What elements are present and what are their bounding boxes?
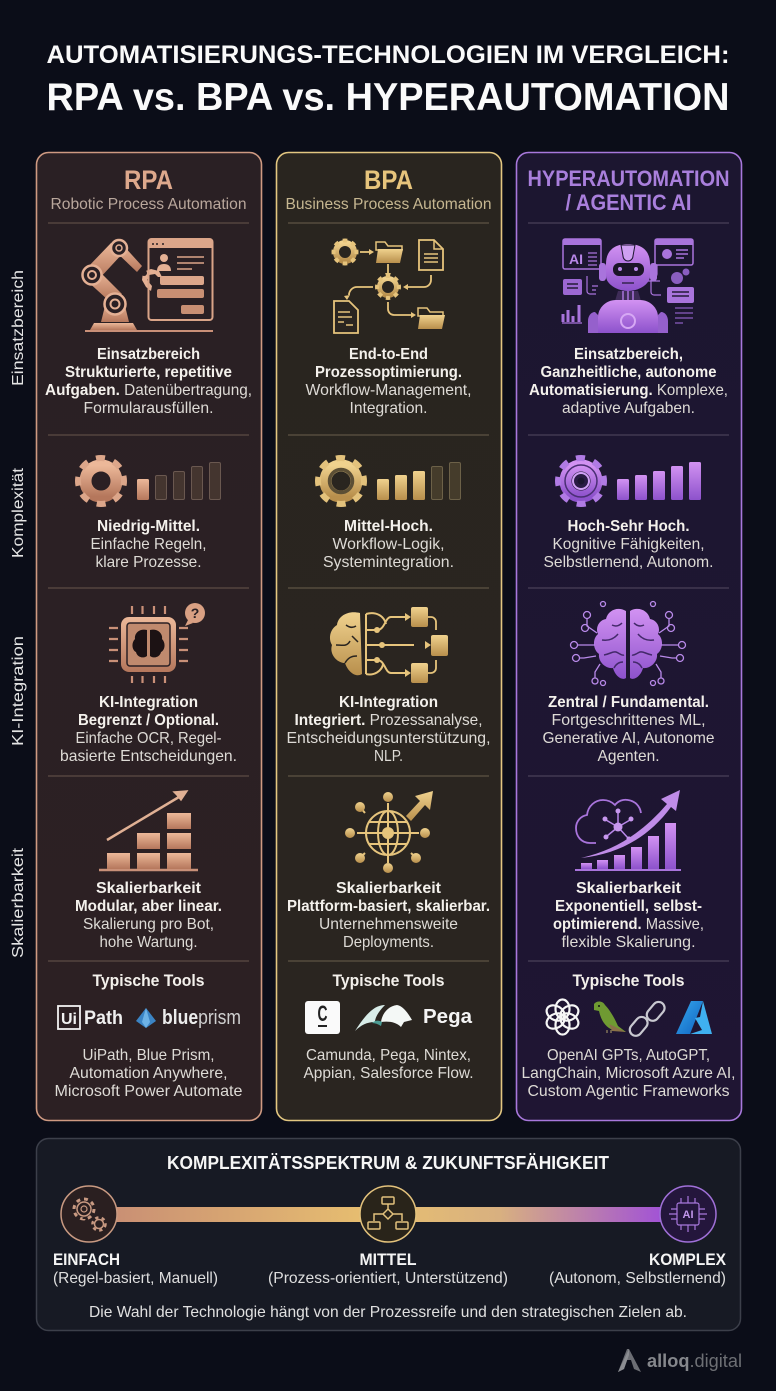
text: Einsatzbereich BPA: Prozessoptimierung. [315,364,462,381]
panel: complexity spectrum [36,1138,740,1330]
text: Komplexität BPA: Systemintegration. [323,554,454,571]
text: tools RPA: UiPath, Blue Prism, [82,1047,214,1064]
conclusion text: Die Wahl der Technologie hängt von der Prozessreife und den strategischen Zielen ab. [89,1304,687,1321]
text: Komplexität RPA: Einfache Regeln, [90,536,206,553]
text: Einsatzbereich BPA: Workflow-Management, [306,382,472,399]
row labels: Skalierbarkeit [10,847,27,958]
text: Skalierbarkeit BPA: Plattform-basiert, skalierbar. [287,898,490,915]
title: RPA vs. BPA vs. HYPERAUTOMATION [46,76,730,119]
text: tools BPA [304,1047,474,1082]
icon: robot arm and form [82,239,213,331]
text: Komplexität Hyperautomation: Selbstlernend, Autonom. [544,554,714,571]
label: Mittel: MITTEL [360,1250,416,1269]
text: Einsatzbereich Hyperautomation: adaptive Aufgaben. [562,400,695,417]
icon: brain to workflow [330,607,448,683]
text: tools Hyperautomation: LangChain, Microsoft Azure AI, [522,1065,736,1082]
text: Einsatzbereich RPA: Formularausfüllen. [84,400,214,417]
text: Einsatzbereich RPA: Aufgaben. Datenübertragung, [45,382,252,399]
icon: simple node with gears [61,1186,117,1242]
text: Komplexität RPA: klare Prozesse. [96,554,202,571]
icon: complex node with AI chip [660,1186,716,1242]
heading: Hyperautomation / Agentic AI: HYPERAUTOMATION [528,166,730,191]
icon: chip with brain [109,603,205,683]
text: KI-Integration BPA: Entscheidungsunterstützung, [286,730,490,747]
text: Einsatzbereich BPA: End-to-End [349,346,428,363]
text: tools Hyperautomation [522,1047,736,1100]
text: KI-Integration Hyperautomation: Agenten. [598,748,660,765]
label: Einfach: EINFACH [53,1250,120,1269]
logo: alloq.digital: alloq.digital [647,1351,742,1371]
label: Mittel: (Prozess-orientiert, Unterstützend) [268,1270,508,1287]
text: Skalierbarkeit RPA: Modular, aber linear. [75,898,222,915]
text: Einsatzbereich RPA: Einsatzbereich [97,346,200,363]
text: tools Hyperautomation: Custom Agentic Frameworks [528,1083,730,1100]
heading: tools Hyperautomation: Typische Tools [572,971,684,990]
text: Skalierbarkeit RPA [75,880,222,951]
text: Einsatzbereich Hyperautomation: Ganzheitliche, autonome [540,364,717,381]
icon: globe network with arrow [345,791,433,873]
icon: AI robot with interfaces: AI [569,251,583,267]
text: Einsatzbereich Hyperautomation: Einsatzbereich, [574,346,683,363]
row labels: Komplexität [10,467,27,558]
text: Komplexität BPA: Workflow-Logik, [332,536,444,553]
text: Skalierbarkeit Hyperautomation: optimierend. Massive, [553,916,704,933]
text: Komplexität Hyperautomation: Kognitive Fähigkeiten, [552,536,704,553]
icon: cloud and exponential growth [575,790,681,870]
text: Einsatzbereich Hyperautomation: Automatisierung. Komplexe, [529,382,728,399]
heading: Hyperautomation / Agentic AI [528,166,730,215]
text: Einsatzbereich Hyperautomation [529,346,728,417]
text: Einsatzbereich BPA: Integration. [350,400,428,417]
text: tools Hyperautomation: OpenAI GPTs, AutoGPT, [547,1047,710,1064]
text: Skalierbarkeit BPA [287,880,490,951]
heading: tools BPA: Typische Tools [332,971,444,990]
heading: tools RPA: Typische Tools [92,971,204,990]
text: tools RPA: Microsoft Power Automate [54,1083,243,1100]
text: tools BPA: Camunda, Pega, Nintex, [306,1047,471,1064]
text: Skalierbarkeit RPA: Skalierbarkeit [96,880,202,897]
text: KI-Integration BPA: KI-Integration [339,694,438,711]
text: Einsatzbereich RPA [45,346,252,417]
icon: complex node with AI chip: AI [682,1209,694,1221]
panel: Hyperautomation [516,152,742,1120]
text: Komplexität RPA: Niedrig-Mittel. [97,518,200,535]
logos: UiPath and Blue Prism: Ui [61,1011,77,1028]
heading: BPA [286,165,492,213]
heading: BPA: Business Process Automation [286,196,492,213]
text: KI-Integration Hyperautomation: Fortgeschrittenes ML, [552,712,706,729]
text: Komplexität BPA [323,518,454,571]
label: Einfach [53,1250,218,1287]
heading: spectrum: KOMPLEXITÄTSSPEKTRUM & ZUKUNFTSFÄHIGKEIT [167,1153,609,1173]
logos: Camunda, Appian, Pega: Pega [423,1006,473,1028]
text: Einsatzbereich BPA [306,346,472,417]
text: KI-Integration Hyperautomation: Generative AI, Autonome [542,730,715,747]
text: KI-Integration RPA: KI-Integration [99,694,198,711]
text: Skalierbarkeit Hyperautomation [553,880,704,951]
text: Skalierbarkeit Hyperautomation: Skalierbarkeit [576,880,682,897]
text: Einsatzbereich RPA: Strukturierte, repetitive [65,364,232,381]
panel: BPA [276,152,502,1120]
label: Einfach: (Regel-basiert, Manuell) [53,1270,218,1287]
title: AUTOMATISIERUNGS-TECHNOLOGIEN IM VERGLEICH: [46,41,730,69]
icon: neural brain [570,602,686,686]
heading: Hyperautomation / Agentic AI: / AGENTIC AI [566,190,692,215]
text: Skalierbarkeit BPA: Skalierbarkeit [336,880,442,897]
logos: OpenAI, AutoGPT, LangChain, Azure [544,999,712,1038]
label: Komplex [549,1250,727,1287]
text: KI-Integration BPA [286,694,490,765]
text: KI-Integration Hyperautomation: Zentral / Fundamental. [548,694,709,711]
icon: gear and high complexity bars [558,458,701,504]
text: Skalierbarkeit Hyperautomation: Exponentiell, selbst- [555,898,702,915]
text: tools RPA [54,1047,243,1100]
text: Skalierbarkeit RPA: Skalierung pro Bot, [83,916,214,933]
text: KI-Integration RPA [60,694,237,765]
icon: middle node with flow chart [360,1186,416,1242]
text: Skalierbarkeit BPA: Unternehmensweite [319,916,458,933]
logo: alloq.digital [618,1349,742,1372]
title [46,41,730,119]
text: Komplexität Hyperautomation [544,518,714,571]
text: Komplexität BPA: Mittel-Hoch. [344,518,433,535]
row labels [10,270,27,958]
text: KI-Integration BPA: Integriert. Prozessanalyse, [294,712,482,729]
icon: chip with brain: ? [191,605,199,621]
text: Skalierbarkeit BPA: Deployments. [343,934,434,951]
text: KI-Integration RPA: Begrenzt / Optional. [78,712,219,729]
icon: AI robot with interfaces [562,239,694,333]
heading: RPA: RPA [124,165,173,195]
text: KI-Integration BPA: NLP. [374,748,403,765]
heading: RPA [50,165,246,213]
icon: gear and low complexity bars [78,458,220,504]
text: Skalierbarkeit RPA: hohe Wartung. [100,934,198,951]
heading: RPA: Robotic Process Automation [50,196,246,213]
logos: Camunda, Appian, Pega: C [318,1001,328,1026]
text: KI-Integration Hyperautomation [542,694,715,765]
text: Skalierbarkeit Hyperautomation: flexible Skalierung. [562,934,696,951]
text: tools BPA: Appian, Salesforce Flow. [304,1065,474,1082]
panel: RPA [36,152,262,1120]
label: Komplex: (Autonom, Selbstlernend) [549,1270,726,1287]
logos: Camunda, Appian, Pega [305,1001,473,1034]
row labels: Einsatzbereich [10,270,27,386]
logos: UiPath and Blue Prism: Path [84,1008,123,1029]
spectrum bar [112,1207,666,1222]
heading: BPA: BPA [364,165,413,195]
text: Komplexität Hyperautomation: Hoch-Sehr Hoch. [568,518,690,535]
label: Komplex: KOMPLEX [649,1250,727,1269]
text: tools RPA: Automation Anywhere, [70,1065,228,1082]
row labels: KI-Integration [10,636,27,746]
label: Mittel [268,1250,508,1287]
text: KI-Integration RPA: Einfache OCR, Regel- [76,730,222,747]
text: Komplexität RPA [90,518,206,571]
text: KI-Integration RPA: basierte Entscheidungen. [60,748,237,765]
icon: stacked blocks and rising arrow [99,791,198,870]
logos: UiPath and Blue Prism: blueprism [162,1007,241,1029]
logos: UiPath and Blue Prism [58,1006,241,1029]
icon: process flow [334,240,445,333]
icon: gear and medium complexity bars [318,458,460,504]
